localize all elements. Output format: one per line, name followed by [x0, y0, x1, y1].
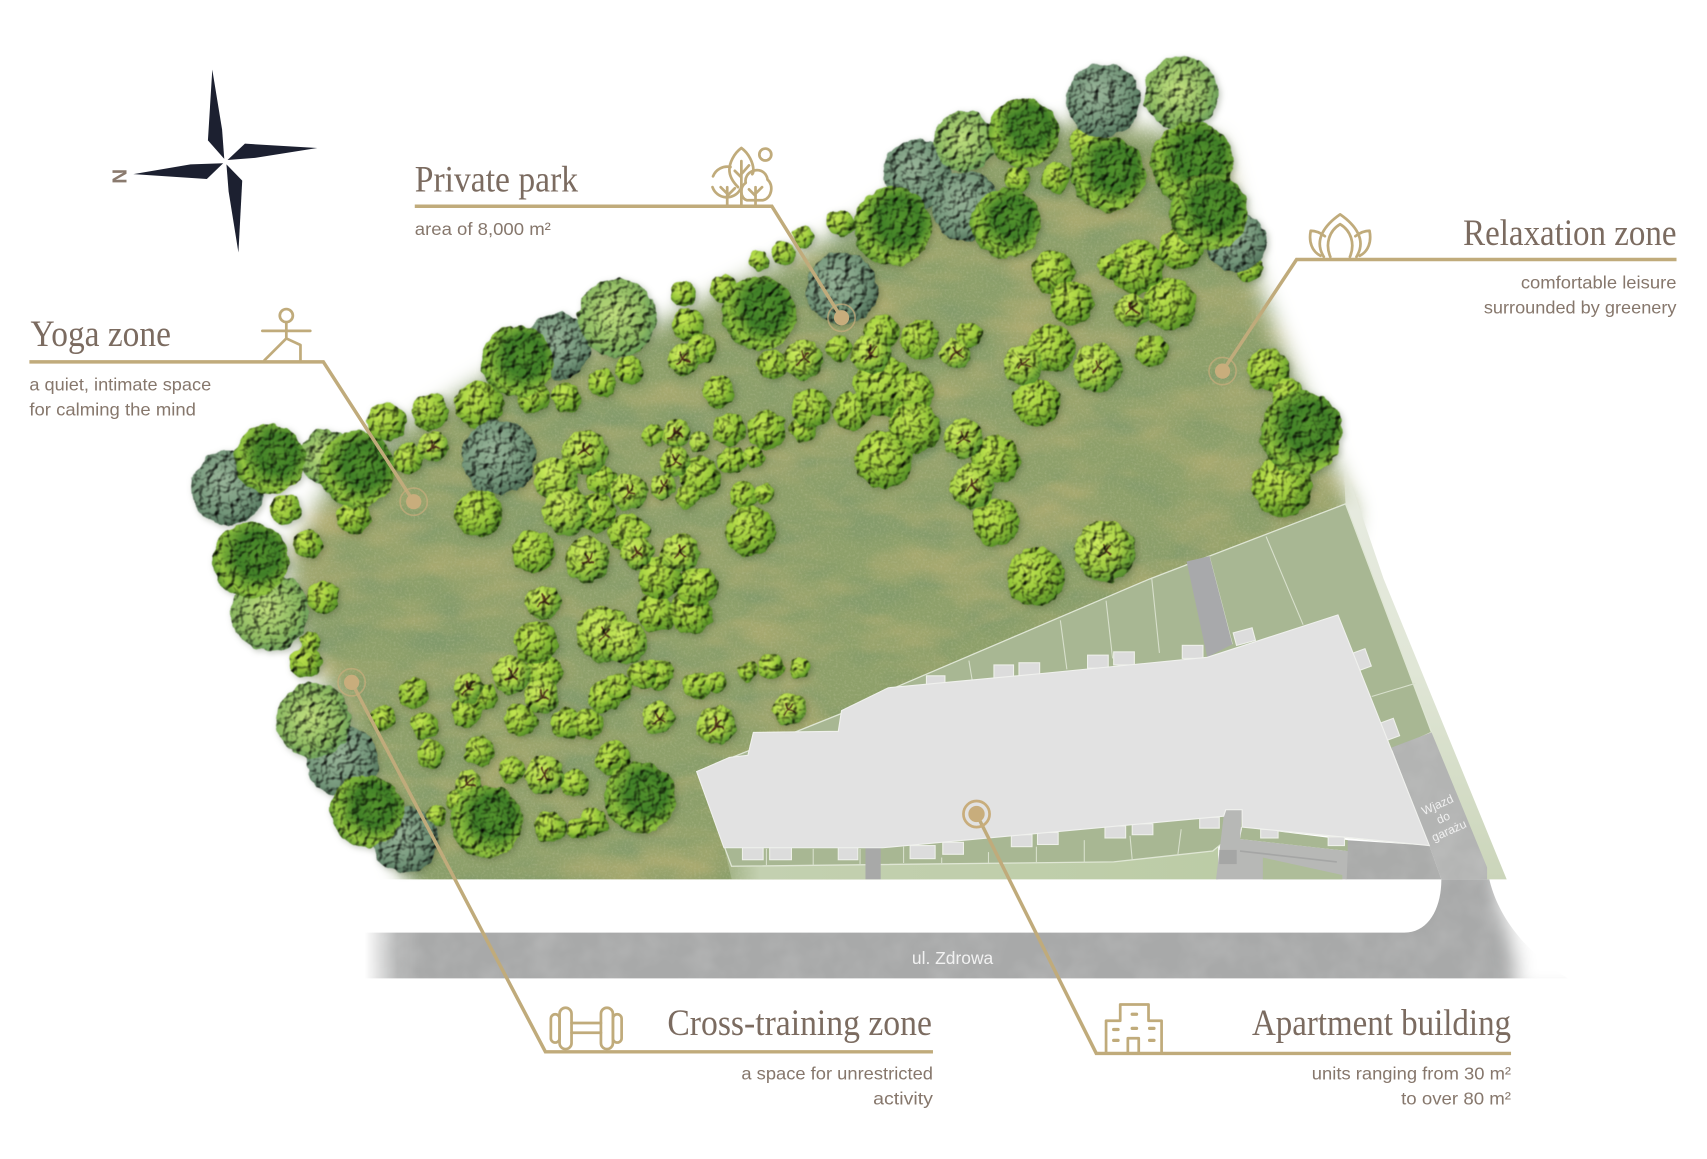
- leader line: [415, 206, 842, 318]
- driveway label: Wjazd: [1419, 792, 1456, 818]
- description: activity: [873, 1089, 933, 1109]
- icon: lotus: [1310, 214, 1370, 257]
- driveway label: garażu: [1429, 817, 1469, 844]
- trees: bright shrubs: [270, 124, 1313, 843]
- outer pale strip: [1343, 461, 1507, 879]
- panel: park lawn: [282, 108, 1370, 880]
- location marker: [338, 669, 365, 696]
- description: for calming the mind: [29, 400, 196, 420]
- road: ul. Zdrowa: [365, 871, 1633, 1012]
- leader line: [29, 362, 414, 502]
- driveway and entrance paving: [1391, 732, 1487, 879]
- description: [1484, 272, 1677, 317]
- light lawn band: [724, 838, 1218, 879]
- trees: brown branches: [427, 303, 1139, 789]
- leader line: [1223, 260, 1677, 371]
- trees: large dark crowns: [212, 98, 1342, 858]
- location marker: [963, 801, 990, 827]
- description: a space for unrestricted: [741, 1064, 933, 1084]
- callout: Private park: [415, 148, 855, 331]
- callout: Apartment building: [963, 801, 1511, 1109]
- balconies: [742, 628, 1400, 860]
- icon: trees: [713, 148, 771, 206]
- north marker: N: [108, 169, 131, 184]
- leader line: [352, 682, 933, 1052]
- trees: pale mixed crowns: [231, 57, 1218, 757]
- description: area of 8,000 m²: [415, 219, 551, 239]
- building footprint: [697, 615, 1429, 848]
- description: comfortable leisure: [1521, 272, 1677, 292]
- description: [29, 375, 211, 420]
- panel: residential plot: [697, 461, 1507, 879]
- location marker: [1209, 357, 1236, 385]
- private gardens: [697, 504, 1432, 866]
- compass rose: [133, 70, 317, 252]
- driveway label: do: [1434, 808, 1452, 827]
- callout: Yoga zone: [29, 309, 427, 515]
- heading: Cross-training zone: [667, 1003, 932, 1044]
- heading: Relaxation zone: [1463, 213, 1677, 254]
- leader line: [977, 814, 1511, 1053]
- location marker: [400, 488, 427, 515]
- description: surrounded by greenery: [1484, 297, 1677, 317]
- callout: Relaxation zone: [1209, 213, 1677, 385]
- trees: branching trees: [418, 293, 1150, 797]
- description: to over 80 m²: [1401, 1089, 1511, 1109]
- heading: Yoga zone: [30, 314, 171, 355]
- garden lot dividers: [766, 537, 1415, 865]
- driveway label: [1418, 791, 1469, 844]
- icon: yoga figure: [262, 309, 310, 360]
- icon: dumbbell: [551, 1008, 622, 1049]
- description: [741, 1064, 933, 1109]
- description: a quiet, intimate space: [29, 375, 211, 395]
- trees: grey-green crowns: [192, 63, 1266, 873]
- icon: apartment block: [1106, 1004, 1162, 1052]
- heading: Apartment building: [1252, 1003, 1511, 1044]
- location marker: [828, 304, 855, 331]
- description: units ranging from 30 m²: [1312, 1064, 1511, 1084]
- trees: [192, 57, 1342, 873]
- road: ul. Zdrowa: ul. Zdrowa: [912, 948, 994, 968]
- callout: Cross-training zone: [338, 669, 933, 1109]
- compass: [108, 70, 317, 252]
- description: [1312, 1064, 1511, 1109]
- heading: Private park: [415, 160, 579, 201]
